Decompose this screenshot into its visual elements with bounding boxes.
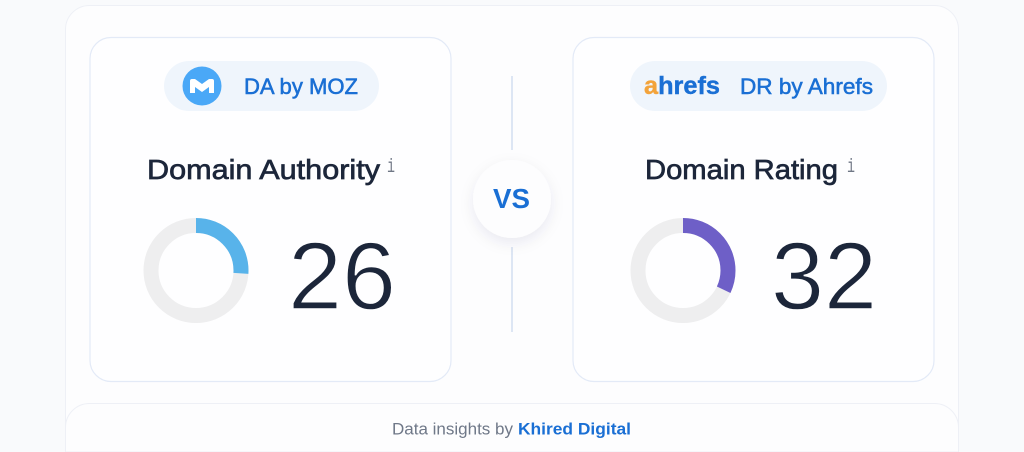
footer bar xyxy=(66,404,958,452)
panel: Domain Authority by MOZ xyxy=(90,38,451,382)
icon: ahrefs logo: ahrefs xyxy=(644,72,720,100)
badge: DA by MOZ xyxy=(164,61,379,111)
VS badge xyxy=(473,160,551,238)
divider line bottom xyxy=(511,247,513,332)
value: 32: 32 xyxy=(771,223,877,330)
divider line top xyxy=(511,76,513,150)
panel: Domain Rating by Ahrefs xyxy=(573,38,934,382)
value: 26: 26 xyxy=(288,223,396,330)
icon: info: i xyxy=(387,156,395,178)
heading: Domain Rating: Domain Rating xyxy=(645,154,838,185)
footer text: Data insights by xyxy=(392,420,513,438)
icon: MOZ logo xyxy=(182,66,222,106)
badge: DR by Ahrefs xyxy=(630,61,887,111)
VS badge: VS xyxy=(493,183,530,214)
icon: info: i xyxy=(847,156,855,178)
heading: Domain Authority: Domain Authority xyxy=(147,154,380,185)
donut chart: 32 percent xyxy=(638,226,728,316)
badge label: DA by MOZ xyxy=(244,74,358,99)
footer text: Khired Digital xyxy=(518,420,631,438)
badge label: DR by Ahrefs xyxy=(740,74,873,99)
donut chart: 26 percent xyxy=(151,226,241,316)
